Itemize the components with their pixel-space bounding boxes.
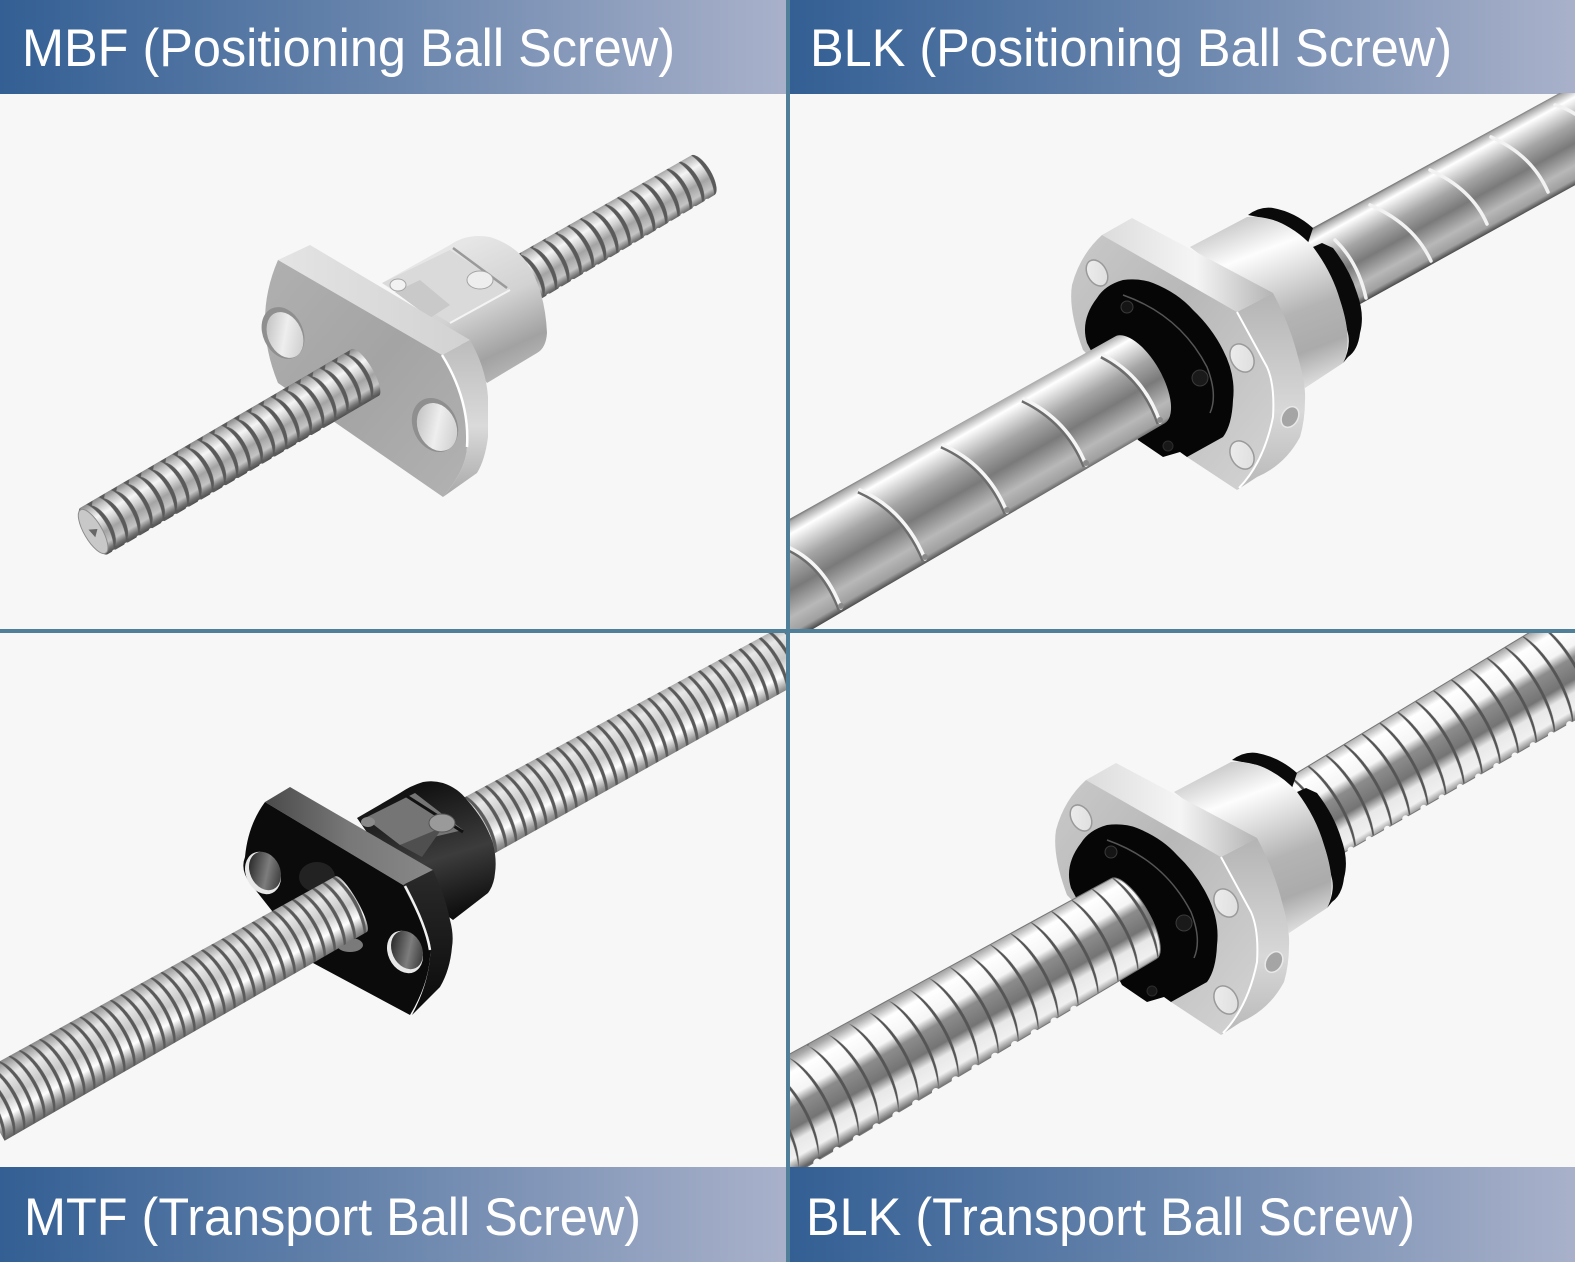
screw shaft front: [72, 345, 386, 561]
panel: BLK positioning ball screw: [739, 0, 1575, 641]
header: BLK positioning: [790, 0, 1575, 94]
screw shaft rear: [1294, 633, 1575, 853]
illustration: MTF ball screw: [0, 623, 813, 1141]
nut body black: [238, 781, 496, 1015]
nut assembly: [1055, 753, 1346, 1035]
header: MBF: MBF (Positioning Ball Screw): [22, 19, 675, 78]
footer: BLK transport: [790, 1167, 1575, 1262]
screw shaft front: [790, 877, 1161, 1167]
panel: BLK transport ball screw: [790, 633, 1575, 1262]
illustration: BLK positioning ball screw: [790, 93, 1575, 629]
shaft front: [790, 335, 1172, 629]
shaft rear: [1309, 93, 1575, 304]
shaft front grooves: [788, 355, 1163, 610]
panel: MTF transport ball screw: [0, 623, 813, 1262]
nut assembly: [1071, 208, 1362, 490]
header: MBF: [0, 0, 786, 94]
footer: MTF: [0, 1167, 786, 1262]
screw shaft rear: [464, 633, 786, 854]
screw shaft front: [0, 869, 375, 1141]
nut body: [253, 236, 547, 497]
illustration: BLK transport ball screw: [790, 633, 1575, 1167]
screw shaft rear: [519, 154, 717, 298]
illustration: MBF ball screw: [72, 148, 724, 561]
footer: BLK transport: BLK (Transport Ball Screw): [806, 1188, 1415, 1247]
header: BLK positioning: BLK (Positioning Ball Screw): [810, 19, 1452, 78]
panel: MBF positioning ball screw: [0, 0, 786, 561]
footer: MTF: MTF (Transport Ball Screw): [24, 1188, 641, 1247]
shaft rear grooves: [1335, 105, 1575, 298]
